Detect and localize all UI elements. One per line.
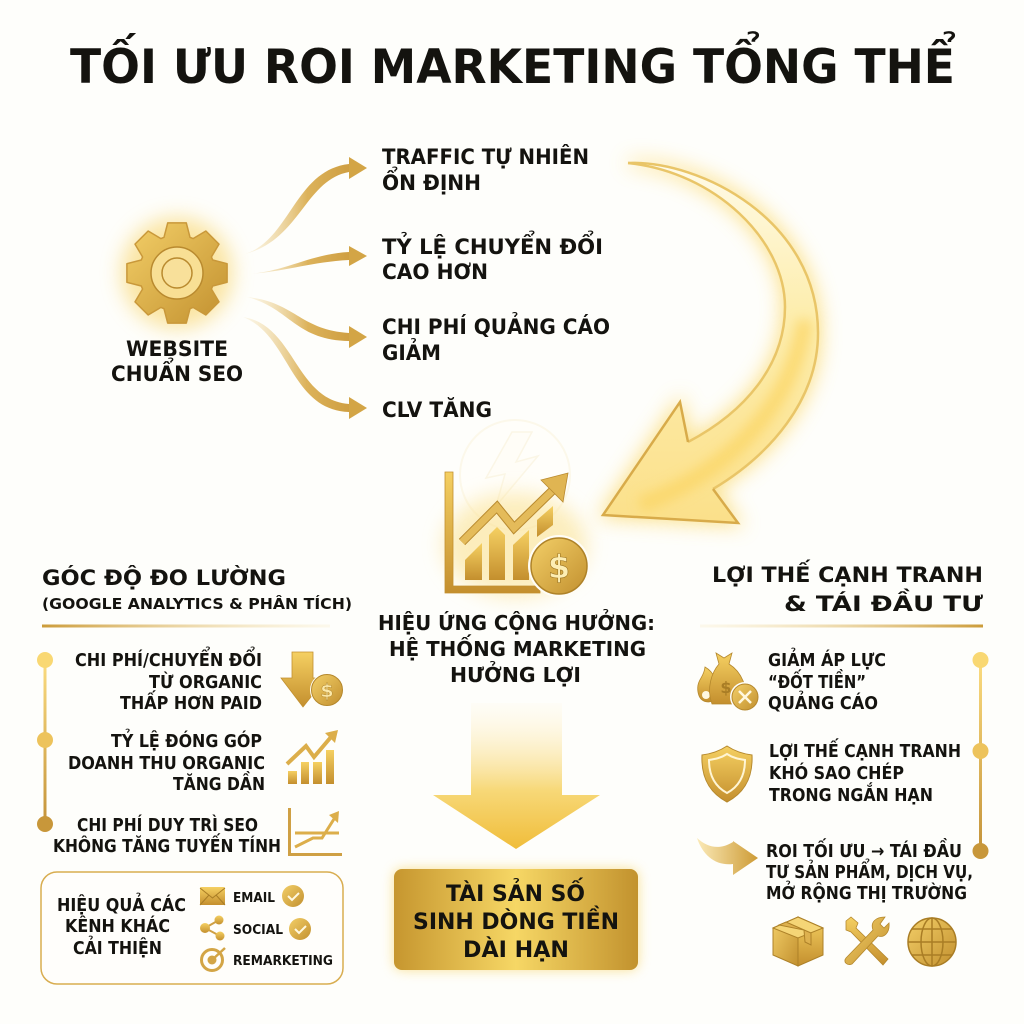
gear label: CHUẨN SEO	[111, 358, 243, 386]
item: reduced ad burn	[768, 648, 886, 714]
center caption: synergy: HƯỞNG LỢI	[450, 662, 581, 687]
benefit: traffic: ỔN ĐỊNH	[382, 166, 481, 195]
icon: email	[200, 887, 225, 905]
item: cost per conversion: THẤP HƠN PAID	[120, 690, 262, 714]
panel: measurement	[37, 564, 352, 984]
item: hard to copy: LỢI THẾ CẠNH TRANH	[769, 738, 961, 762]
item: reinvest	[766, 838, 973, 904]
heading: measurement	[42, 564, 352, 613]
item: seo maintenance cost: KHÔNG TĂNG TUYẾN TÍNH	[53, 833, 281, 857]
result plate: SINH DÒNG TIỀN	[413, 906, 619, 935]
benefit: traffic	[382, 144, 589, 195]
heading: measurement: GÓC ĐỘ ĐO LƯỜNG	[42, 564, 286, 591]
icon: tools	[845, 917, 889, 965]
arrow: to conversion rate	[247, 246, 367, 274]
item: cost per conversion: CHI PHÍ/CHUYỂN ĐỔI	[75, 646, 262, 671]
center caption: synergy: HỆ THỐNG MARKETING	[389, 635, 646, 661]
benefit: ad cost: CHI PHÍ QUẢNG CÁO	[382, 312, 610, 339]
item: reduced ad burn: “ĐỐT TIỀN”	[768, 669, 866, 693]
item: hard to copy: KHÓ SAO CHÉP	[769, 762, 904, 784]
benefit: conversion: TỶ LỆ CHUYỂN ĐỔI	[382, 230, 603, 259]
item: organic revenue share: TỶ LỆ ĐÓNG GÓP	[111, 729, 262, 752]
item: seo maintenance cost	[53, 814, 281, 857]
icon: target	[202, 948, 225, 970]
icon: social	[200, 916, 224, 940]
item: hard to copy: TRONG NGẮN HẠN	[769, 782, 933, 806]
timeline	[37, 652, 53, 832]
panel: competitive advantage	[697, 559, 988, 966]
item: reduced ad burn: QUẢNG CÁO	[768, 691, 878, 714]
icon: growth chart with coin: $	[548, 548, 570, 586]
item: organic revenue share: DOANH THU ORGANIC	[68, 754, 265, 774]
item: organic revenue share	[68, 729, 265, 795]
channel: social	[233, 918, 311, 940]
gear label: WEBSITE	[126, 337, 228, 361]
item: seo maintenance cost: CHI PHÍ DUY TRÌ SEO	[77, 814, 258, 836]
benefit: clv: CLV TĂNG	[382, 397, 492, 422]
icon: down arrow and coin	[281, 652, 344, 707]
channel: remarketing: REMARKETING	[233, 953, 333, 969]
heading: competitive advantage	[712, 559, 983, 617]
benefit: conversion	[382, 230, 603, 284]
center caption: synergy	[378, 610, 655, 687]
benefit: conversion: CAO HƠN	[382, 260, 488, 284]
channel: email	[233, 885, 304, 907]
title: TỐI ƯU ROI MARKETING TỔNG THỂ	[70, 32, 956, 95]
icon: shield	[702, 746, 752, 802]
item: reinvest: ROI TỐI ƯU → TÁI ĐẦU	[766, 838, 962, 862]
heading: measurement: (GOOGLE ANALYTICS & PHÂN TÍCH)	[42, 594, 352, 613]
item: organic revenue share: TĂNG DẦN	[173, 771, 265, 795]
box label: CẢI THIỆN	[73, 936, 162, 959]
benefit: ad cost: GIẢM	[382, 338, 441, 365]
gear label	[111, 337, 243, 386]
icon: money bag, flame, cross: $	[720, 678, 732, 697]
item: cost per conversion: TỪ ORGANIC	[149, 671, 262, 693]
box label: KÊNH KHÁC	[65, 915, 170, 937]
icon: line chart	[288, 808, 342, 856]
arrow: big curved	[603, 163, 818, 523]
item: reduced ad burn: GIẢM ÁP LỰC	[768, 648, 886, 671]
icon: money bag, flame, cross	[698, 653, 760, 712]
result plate: TÀI SẢN SỐ	[446, 878, 585, 907]
icon: gear	[121, 217, 233, 329]
box: other channels	[41, 872, 343, 984]
item: hard to copy	[769, 738, 961, 806]
icon: growth chart with coin	[443, 420, 590, 597]
center caption: synergy: HIỆU ỨNG CỘNG HƯỞNG:	[378, 610, 655, 635]
icon: down arrow and coin: $	[320, 680, 334, 702]
website source: gear and label	[111, 217, 243, 386]
arrow: reinvest	[697, 838, 758, 875]
benefit list	[382, 144, 610, 422]
arrow: center down	[433, 703, 600, 849]
icon: bars with arrow	[287, 730, 338, 784]
heading: competitive advantage: LỢI THẾ CẠNH TRANH	[712, 559, 983, 588]
arrow: to clv	[243, 317, 367, 419]
box label	[57, 893, 186, 959]
item: cost per conversion	[75, 646, 262, 714]
timeline	[972, 652, 988, 859]
channel: email: EMAIL	[233, 890, 275, 906]
heading: competitive advantage: & TÁI ĐẦU TƯ	[784, 588, 983, 617]
box label: HIỆU QUẢ CÁC	[57, 893, 186, 916]
result plate: DÀI HẠN	[463, 937, 569, 963]
icon: box	[773, 917, 823, 966]
item: reinvest: MỞ RỘNG THỊ TRƯỜNG	[766, 880, 967, 904]
channel: social: SOCIAL	[233, 922, 283, 938]
item: reinvest: TƯ SẢN PHẨM, DỊCH VỤ,	[766, 858, 973, 883]
benefit: ad cost	[382, 312, 610, 365]
arrow: to traffic	[245, 157, 367, 254]
arrow: to ad cost	[247, 297, 367, 348]
benefit: traffic: TRAFFIC TỰ NHIÊN	[382, 144, 589, 169]
result plate	[394, 869, 638, 970]
icon: globe	[908, 918, 956, 966]
